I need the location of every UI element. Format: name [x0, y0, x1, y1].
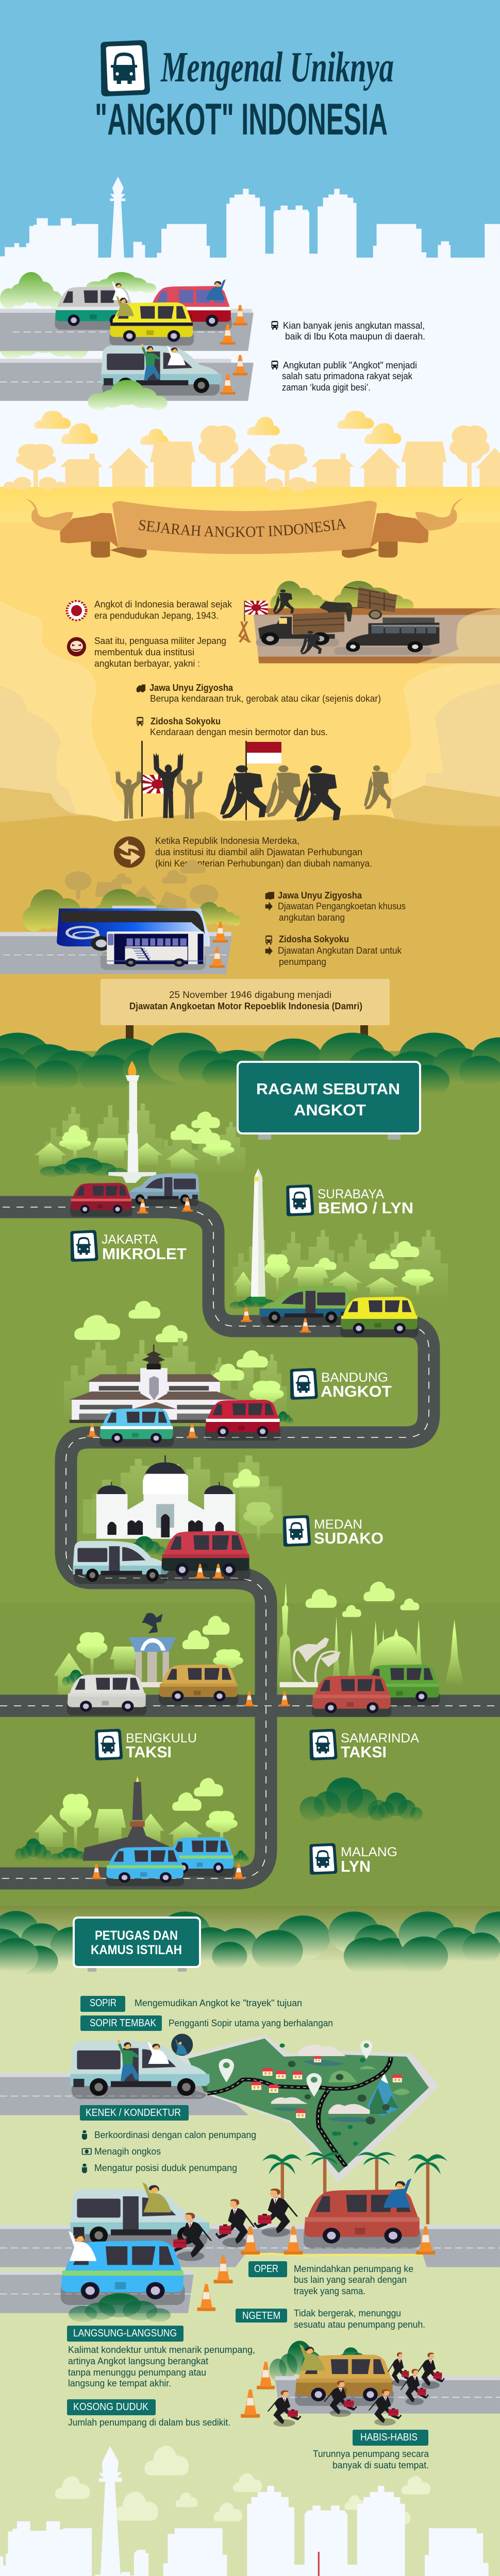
- term: langsung: artinya Angkot langsung berangkat: [68, 2356, 208, 2366]
- institution list: Jawa Unyu Zigyosha: [149, 683, 234, 693]
- clouds: [55, 2446, 430, 2524]
- bushes: [22, 889, 241, 931]
- skyline: [0, 177, 500, 289]
- route map: [178, 2035, 439, 2183]
- traffic scene: [0, 272, 254, 410]
- scenes: habis-habis and skyline: [0, 2341, 500, 2576]
- cart and ox: [320, 587, 397, 621]
- paragraph 1: era pendudukan Jepang, 1943.: [94, 611, 219, 621]
- cones: [137, 1197, 193, 1213]
- labels: city names: TAKSI: [341, 1743, 387, 1761]
- term: kenek: [80, 2105, 256, 2173]
- labels: city names: BANDUNG: [321, 1370, 388, 1385]
- paragraph: merdeka: (kini Kementerian Perhubungan) dan diubah namanya.: [155, 858, 372, 869]
- cones: [241, 2362, 275, 2418]
- samarinda vans: [312, 1665, 440, 1717]
- section: hero: [0, 40, 500, 410]
- text: sejarah: [94, 519, 381, 737]
- forest band: [0, 1911, 500, 1977]
- surabaya vans: [259, 1286, 419, 1337]
- scenes 1: [64, 1168, 448, 1524]
- labels: city names: LYN: [341, 1857, 371, 1875]
- van red: [148, 286, 232, 331]
- monument: tugu pahlawan: [251, 1168, 265, 1302]
- intro text: salah satu primadona rakyat sejak: [282, 371, 413, 381]
- van white: [101, 345, 222, 396]
- icons: [265, 892, 274, 955]
- labels: city names: SURABAYA: [318, 1187, 384, 1201]
- road: [0, 1207, 500, 1878]
- bushes: [0, 272, 156, 359]
- paragraph: merdeka: [114, 836, 372, 869]
- sign: petugas: KAMUS ISTILAH: [91, 1943, 182, 1957]
- cones: [209, 922, 228, 968]
- hills: [0, 773, 500, 842]
- van: kenek: [71, 2182, 210, 2247]
- landmark: tugu malang: [83, 1776, 169, 1861]
- paragraph: merdeka: dua institusi itu diambil alih Djawatan Perhubungan: [155, 847, 362, 857]
- history scene: [67, 581, 500, 726]
- kamus scenes: [0, 2033, 500, 2322]
- truck: [258, 612, 344, 645]
- big bus: [57, 906, 210, 951]
- heading on ribbon: SEJARAH ANGKOT INDONESIA: [139, 519, 346, 537]
- term: kosong duduk: [67, 2399, 230, 2428]
- term: ngetem: Tidak bergerak, menunggu: [294, 2308, 401, 2318]
- paragraph 2: membentuk dua institusi: [94, 647, 194, 657]
- title: script line: Mengenal Uniknya: [160, 43, 394, 91]
- van green: [55, 286, 135, 330]
- malang backdrop: [15, 1778, 249, 1862]
- icon: rising sun: [67, 601, 86, 620]
- skyline: [0, 2446, 500, 2576]
- road: [275, 2376, 500, 2414]
- icon: truck: [137, 685, 145, 692]
- clouds: [74, 1301, 188, 1342]
- bird statue: [280, 1637, 341, 1687]
- board: damri: 25 November 1946 digabung menjadi: [169, 990, 331, 1000]
- logos for upper cities: [70, 1184, 318, 1400]
- institution list: [149, 683, 381, 737]
- monas upper part: [64, 1061, 220, 1139]
- crowd: flags: [141, 741, 281, 820]
- sign: ragam sebutan: ANGKOT: [294, 1101, 366, 1119]
- soldiers: [273, 589, 322, 654]
- term: langsung: tanpa menunggu penumpang atau: [68, 2367, 206, 2378]
- van: sopir: [71, 2040, 210, 2099]
- bushes: [271, 581, 414, 614]
- term: ngetem: [236, 2308, 425, 2330]
- term: sopir tembak: Pengganti Sopir utama yang berhalangan: [169, 2018, 333, 2028]
- cones: [241, 1307, 311, 1333]
- van gold: [295, 2344, 394, 2406]
- cones: [194, 1564, 224, 1579]
- medan vans: [73, 1531, 251, 1584]
- samarinda backdrop: [306, 1582, 419, 1617]
- paragraph 1: [94, 599, 232, 621]
- cones: [197, 2226, 435, 2311]
- scene: modern bus: [0, 859, 274, 974]
- small bus: [101, 931, 206, 970]
- labels: city names: SUDAKO: [314, 1529, 384, 1547]
- tan silhouettes: [65, 859, 219, 908]
- text: transformed institutions: penumpang: [279, 957, 326, 967]
- dark bus: [346, 618, 439, 652]
- ribbon banner: [25, 498, 463, 558]
- crowd: soldiers dark: [154, 753, 341, 822]
- institution list: Zidosha Sokyoku: [151, 716, 221, 726]
- bandung backdrop: [64, 1338, 293, 1424]
- text: transformed institutions: Djawatan Angkutan Darat untuk: [278, 945, 402, 956]
- van yellow: [109, 302, 194, 346]
- paragraph 2: angkutan berbayar, yakni :: [94, 658, 200, 669]
- road 2: [0, 2225, 500, 2313]
- forest top: [0, 1032, 500, 1097]
- term: oper: [248, 2261, 413, 2296]
- term: oper: Memindahkan penumpang ke: [294, 2264, 413, 2274]
- sign: ragam sebutan: RAGAM SEBUTAN: [256, 1080, 400, 1098]
- conductor: [141, 344, 186, 381]
- road: [0, 2073, 249, 2115]
- term: kenek: Menagih ongkos: [94, 2146, 161, 2157]
- term: habis-habis: HABIS-HABIS: [360, 2432, 418, 2443]
- labels: city names: MEDAN: [314, 1517, 362, 1532]
- intro text: zaman ‘kuda gigit besi’.: [282, 382, 371, 393]
- labels: city names: TAKSI: [126, 1743, 172, 1761]
- icon: mask: [67, 637, 86, 656]
- term: habis-habis: Turunnya penumpang secara: [313, 2449, 429, 2459]
- section: ragam sebutan: [0, 1061, 500, 1886]
- title icon: [101, 40, 150, 96]
- term: oper: OPER: [254, 2263, 278, 2275]
- cones: [91, 1863, 244, 1879]
- labels: city names: ANGKOT: [321, 1382, 392, 1400]
- medan backdrop top: [92, 1455, 280, 1524]
- term: ngetem: NGETEM: [242, 2310, 280, 2321]
- paragraph 1: Angkot di Indonesia berawal sejak: [94, 599, 232, 609]
- term: habis-habis: [313, 2430, 429, 2470]
- intro text: baik di Ibu Kota maupun di daerah.: [285, 331, 425, 342]
- trees and houses: [4, 426, 500, 492]
- jakarta vans: [70, 1173, 199, 1217]
- logos: [95, 1729, 337, 1875]
- hills and crowd: [0, 741, 500, 1043]
- scenes 2: [15, 1486, 464, 1886]
- flag: [239, 601, 268, 642]
- labels: city names: MIKROLET: [102, 1245, 187, 1263]
- clouds: [35, 411, 401, 445]
- bush: [123, 1536, 166, 1556]
- board: damri: [101, 979, 390, 1043]
- board: damri: Djawatan Angkoetan Motor Repoeblik Indonesia (Damri): [129, 1001, 362, 1011]
- van: blue: [61, 2231, 185, 2305]
- icon: bus: [137, 717, 143, 726]
- icons: kenek list: [82, 2130, 91, 2173]
- institution list: Kendaraan dengan mesin bermotor dan bus.: [150, 727, 328, 737]
- bushes: [270, 2341, 370, 2381]
- small clouds: [64, 1111, 220, 1139]
- surabaya backdrop: [229, 1230, 448, 1309]
- sign: petugas: [74, 1918, 200, 1972]
- text: transformed institutions: Djawatan Pengangkoetan khusus: [278, 901, 406, 911]
- roads: [0, 309, 254, 401]
- term: sopir tembak: SOPIR TEMBAK: [90, 2018, 157, 2029]
- landmark: masjid raya medan: [96, 1494, 236, 1539]
- jakarta backdrop: [35, 1104, 245, 1183]
- road: [0, 932, 232, 974]
- text: transformed institutions: Zidosha Sokyoku: [279, 934, 349, 944]
- term: langsung: Kalimat kondektur untuk menarik penumpang,: [68, 2345, 255, 2355]
- institution list: Berupa kendaraan truk, gerobak atau cikar (sejenis dokar): [150, 693, 381, 704]
- labels: city names: SAMARINDA: [341, 1731, 419, 1745]
- paragraph: merdeka: Ketika Republik Indonesia Merdeka,: [155, 836, 299, 846]
- term: oper: bus lain yang searah dengan: [294, 2275, 407, 2285]
- labels: city names: [102, 1187, 419, 1875]
- cones: [220, 305, 247, 395]
- term: sopir: [80, 1996, 302, 2012]
- intro text: [272, 320, 425, 393]
- intro text: Kian banyak jenis angkutan massal,: [283, 320, 425, 331]
- bandung vans: [99, 1400, 280, 1447]
- cones: [87, 1423, 198, 1438]
- paragraph 2: [94, 636, 226, 669]
- translucent wave over road: [418, 608, 500, 663]
- term: habis-habis: banyak di suatu tempat.: [332, 2460, 429, 2470]
- section: petugas: [0, 1911, 500, 2576]
- bush: [69, 2293, 171, 2322]
- term: sopir: SOPIR: [90, 1997, 116, 2009]
- text: transformed institutions: Jawa Unyu Zigyosha: [278, 890, 362, 901]
- tokyo scene: [222, 2552, 500, 2576]
- bengkulu vans: [67, 1665, 239, 1716]
- term: kosong duduk: KOSONG DUDUK: [73, 2401, 149, 2413]
- medan logo: [283, 1515, 311, 1547]
- labels: city names: JAKARTA: [102, 1232, 158, 1247]
- term: kenek: KENEK / KONDEKTUR: [86, 2107, 181, 2119]
- monument: monas top: [126, 1061, 139, 1136]
- palms: [262, 2152, 447, 2224]
- text: transformed institutions: angkutan barang: [279, 912, 345, 923]
- runners: [169, 2189, 298, 2261]
- monument: monas base: [108, 1133, 156, 1183]
- term: langsung: LANGSUNG-LANGSUNG: [73, 2328, 177, 2339]
- term: langsung: langsung ke tempat akhir.: [68, 2378, 171, 2388]
- term: oper: trayek yang sama.: [294, 2286, 365, 2296]
- sign: ragam sebutan: [238, 1062, 420, 1140]
- front bush: [88, 380, 168, 410]
- term: langsung: [67, 2326, 255, 2388]
- intro text: Angkutan publik "Angkot" menjadi: [283, 360, 417, 370]
- sign: petugas: PETUGAS DAN: [95, 1928, 178, 1943]
- dark bushes: [299, 1777, 423, 1821]
- side waves: [0, 601, 500, 773]
- icon: swap arrows: [114, 837, 145, 868]
- lime backdrop: [83, 1486, 282, 1541]
- mosque silhouette: [277, 1582, 464, 1687]
- term: kenek: Berkoordinasi dengan calon penumpang: [94, 2130, 256, 2140]
- cones: [244, 1691, 290, 1706]
- paragraph 2: Saat itu, penguasa militer Jepang: [94, 636, 226, 646]
- term: ngetem: sesuatu atau penumpang penuh.: [294, 2319, 425, 2330]
- avatar: [171, 2033, 193, 2056]
- passengers: [112, 279, 226, 316]
- road: [254, 608, 500, 663]
- landmark: gedung sate: [70, 1345, 239, 1423]
- section: sejarah village: [0, 411, 500, 773]
- landmark: bengkulu monument: [128, 1613, 176, 1687]
- crowd: soldiers tan: [115, 765, 391, 819]
- term: sopir: Mengemudikan Angkot ke "trayek" tujuan: [135, 1998, 302, 2008]
- malang vans: [106, 1837, 235, 1886]
- bengkulu backdrop: [54, 1616, 243, 1694]
- runners: [267, 2352, 445, 2427]
- term: sopir tembak: [80, 2015, 333, 2031]
- rising sun flag: [143, 775, 173, 793]
- labels: city names: BEMO / LYN: [318, 1199, 413, 1217]
- term: kosong duduk: Jumlah penumpang di dalam bus sedikit.: [68, 2417, 230, 2428]
- tower: [298, 2552, 341, 2576]
- text: transformed institutions: [278, 890, 406, 967]
- labels: city names: MALANG: [341, 1845, 397, 1859]
- van: red: [304, 2178, 421, 2249]
- medan domes: [97, 1455, 234, 1494]
- term: kenek: Mengatur posisi duduk penumpang: [94, 2163, 237, 2173]
- labels: city names: BENGKULU: [126, 1731, 197, 1745]
